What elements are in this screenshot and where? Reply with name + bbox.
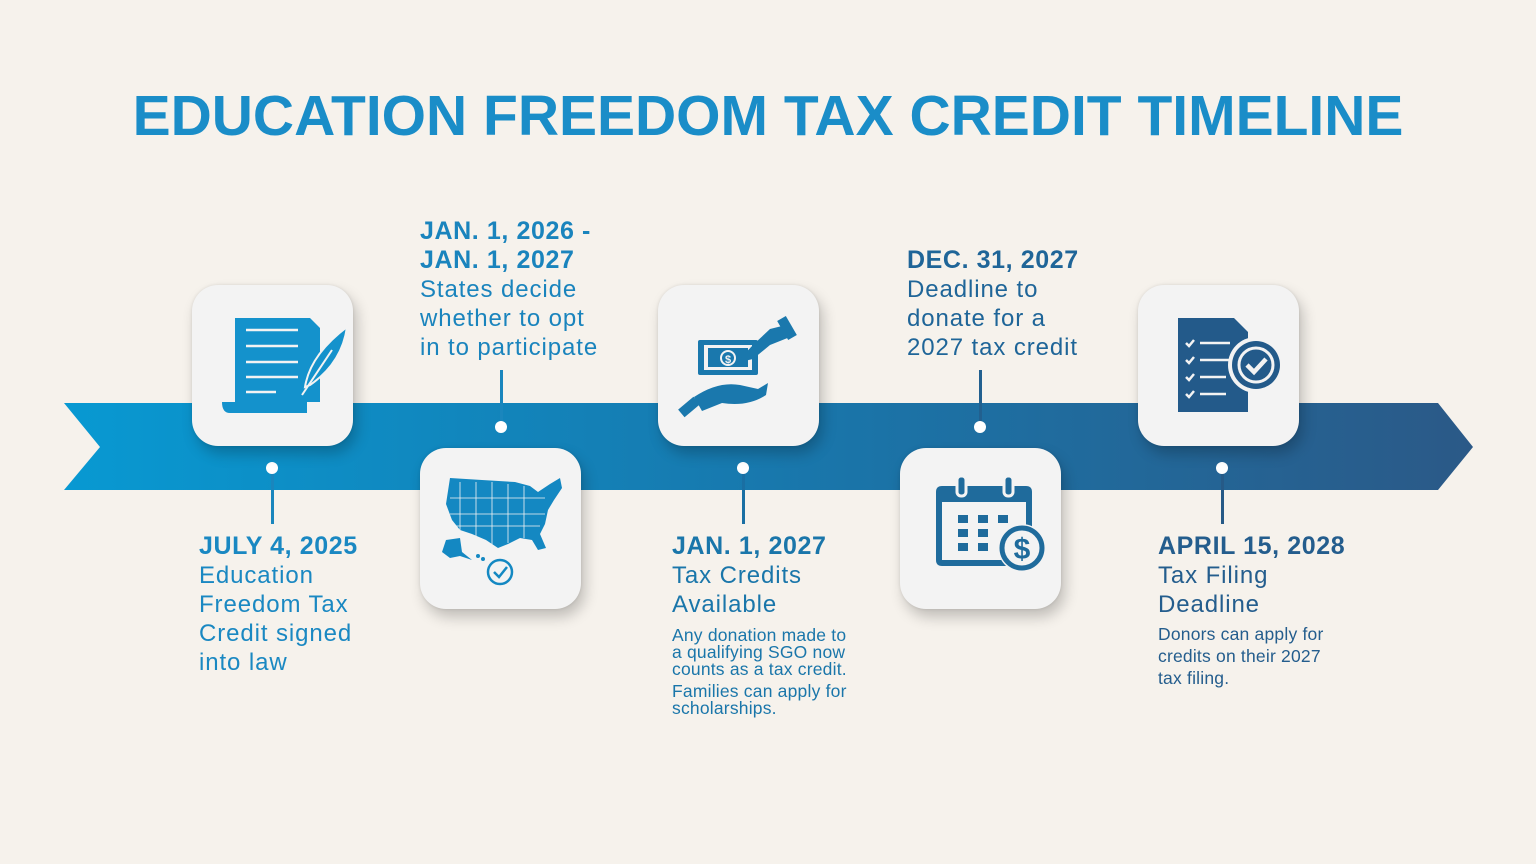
description: Jan 1 2027: [672, 625, 847, 718]
icon box: scroll and quill: [192, 285, 353, 446]
icon box: calendar with dollar: [900, 448, 1061, 609]
text: July 4 2025: Credit signed: [199, 620, 352, 647]
text: Jan 1 2026: in to participate: [420, 334, 598, 361]
text: Dec 31 2027: 2027 tax credit: [907, 334, 1078, 361]
text: Jan 1 2027: [672, 532, 847, 718]
description: Jan 1 2027: Any donation made to: [672, 625, 846, 645]
item 2 connector: [495, 370, 507, 433]
text: Dec 31 2027: Deadline to: [907, 276, 1038, 303]
icon box: calendar with dollar: $: [1014, 533, 1031, 566]
description: Jan 1 2027: scholarships.: [672, 698, 777, 718]
icon box: US map with check: [420, 448, 581, 609]
description: April 15 2028: [1158, 624, 1324, 688]
text: Jan 1 2027: JAN. 1, 2027: [672, 532, 827, 560]
text: Jan 1 2026: JAN. 1, 2027: [420, 246, 575, 274]
icon box: money hands: $: [725, 354, 731, 366]
item 5 connector: [1216, 462, 1228, 524]
text: April 15 2028: Deadline: [1158, 591, 1260, 618]
item 1 connector: [266, 462, 278, 524]
text: July 4 2025: into law: [199, 649, 288, 676]
item 4 connector: [974, 370, 986, 433]
text: April 15 2028: Tax Filing: [1158, 562, 1268, 589]
description: Jan 1 2027: counts as a tax credit.: [672, 659, 847, 679]
text: July 4 2025: Education: [199, 562, 314, 589]
icon box: checklist document: [1138, 285, 1299, 446]
item 3 connector: [737, 462, 749, 524]
description: April 15 2028: Donors can apply for: [1158, 624, 1323, 644]
text: Jan 1 2027: Tax Credits: [672, 562, 802, 589]
text: July 4 2025: Freedom Tax: [199, 591, 349, 618]
text: Dec 31 2027: [907, 246, 1079, 361]
text: April 15 2028: [1158, 532, 1345, 688]
text: Jan 1 2026: [420, 217, 598, 361]
text: Jan 1 2026: JAN. 1, 2026 -: [420, 217, 591, 245]
text: July 4 2025: JULY 4, 2025: [199, 532, 358, 560]
text: July 4 2025: [199, 532, 358, 676]
text: Dec 31 2027: DEC. 31, 2027: [907, 246, 1079, 274]
title: EDUCATION FREEDOM TAX CREDIT TIMELINE: [133, 84, 1403, 148]
text: Jan 1 2027: Available: [672, 591, 777, 618]
icon box: money hands: [658, 285, 819, 446]
description: April 15 2028: credits on their 2027: [1158, 646, 1321, 666]
text: Jan 1 2026: whether to opt: [420, 305, 585, 332]
description: Jan 1 2027: a qualifying SGO now: [672, 642, 845, 662]
description: Jan 1 2027: Families can apply for: [672, 681, 847, 701]
text: Dec 31 2027: donate for a: [907, 305, 1046, 332]
description: April 15 2028: tax filing.: [1158, 668, 1229, 688]
text: April 15 2028: APRIL 15, 2028: [1158, 532, 1345, 560]
text: Jan 1 2026: States decide: [420, 276, 577, 303]
